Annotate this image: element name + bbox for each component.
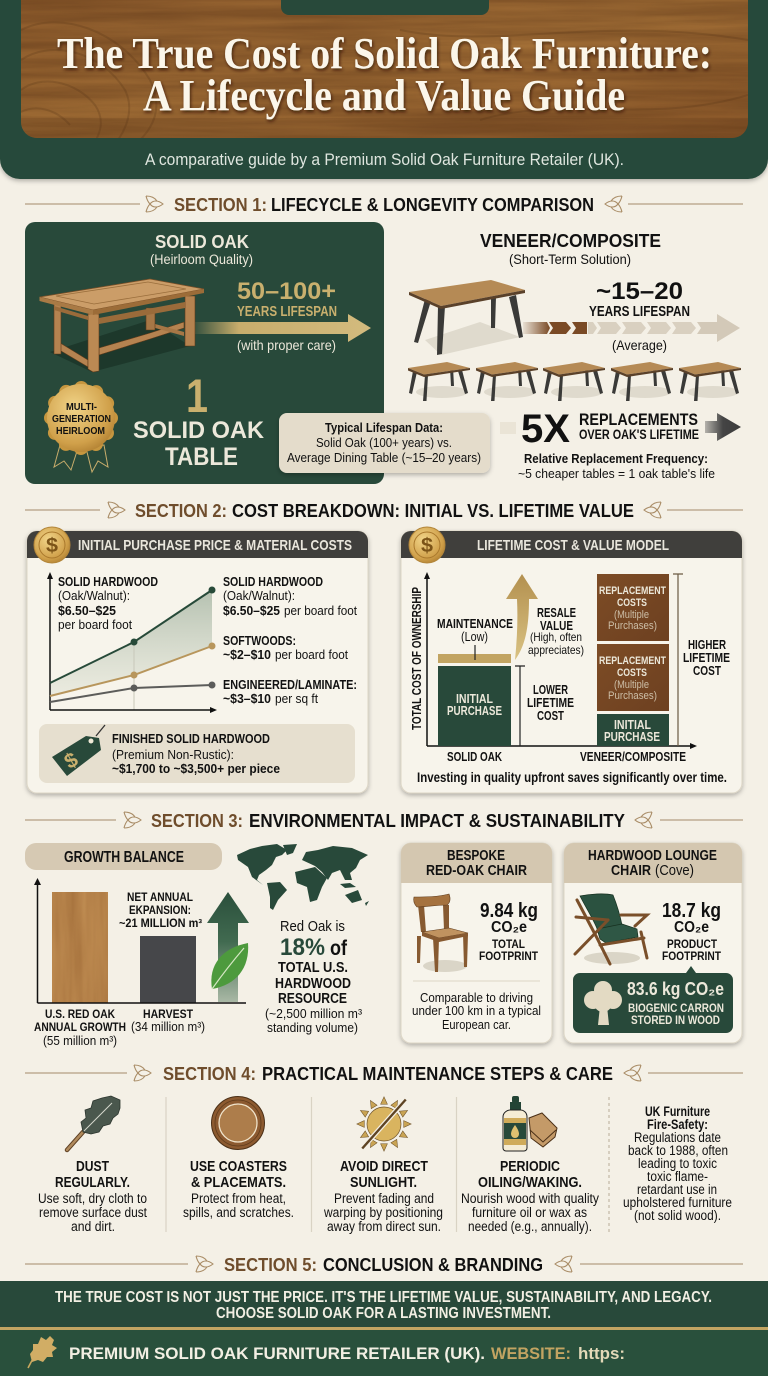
finished hardwood price box: FINISHED SOLID HARDWOOD: [112, 731, 270, 746]
stacked bar chart: LIFETIME: [527, 696, 574, 710]
red oak share stat: of: [330, 937, 348, 960]
UK fire safety note: (not solid wood).: [634, 1208, 721, 1223]
callout: typical lifespan data: Average Dining Table (~15–20 years): [287, 451, 481, 465]
section 5 heading: SECTION 5:: [224, 1254, 317, 1275]
heading pill: [25, 843, 222, 870]
icon: oak leaf: [28, 1336, 57, 1368]
red oak share stat: 18%: [280, 934, 325, 961]
red oak share stat: standing volume): [267, 1020, 358, 1035]
icon: world map: [237, 844, 369, 910]
panel heading: INITIAL PURCHASE PRICE & MATERIAL COSTS: [78, 537, 352, 554]
icon: lounge chair: [575, 894, 647, 964]
bar labels: (55 million m³): [43, 1034, 117, 1048]
icon: crossed-out sun: [357, 1097, 411, 1151]
step: avoid sunlight: SUNLIGHT.: [350, 1174, 417, 1191]
stacked bar chart: COST: [537, 709, 564, 723]
stacked bar chart: (Low): [461, 630, 488, 644]
footprint figures: FOOTPRINT: [479, 949, 539, 963]
chart labels: SOFTWOODS:: [223, 633, 296, 648]
panel: initial purchase price: [27, 527, 368, 793]
footer band: PREMIUM SOLID OAK FURNITURE RETAILER (UK).: [69, 1344, 485, 1363]
step: dust regularly: Use soft, dry cloth to: [38, 1191, 147, 1206]
stacked bar chart: (Multiple: [614, 609, 649, 621]
bar labels: ANNUAL GROWTH: [34, 1020, 126, 1034]
growth balance chart: [25, 843, 249, 1048]
stacked bar chart: RESALE: [537, 606, 576, 620]
step: periodic oiling: OILING/WAKING.: [478, 1174, 582, 1191]
panel: bespoke chair: [401, 843, 552, 1043]
stacked bar chart: LOWER: [533, 683, 568, 697]
net expansion label: NET ANNUAL: [127, 892, 193, 904]
badge: heirloom medal: GENERATION: [52, 413, 111, 425]
biogenic carbon callout: STORED IN WOOD: [631, 1013, 720, 1027]
step: use coasters: [183, 1096, 294, 1220]
solid oak heading: [150, 232, 253, 267]
stacked bar chart: Purchases): [608, 690, 657, 702]
panel: bespoke chair: RED-OAK CHAIR: [426, 863, 527, 879]
footprint figures: CO₂e: [491, 919, 527, 936]
panel heading: LIFETIME COST & VALUE MODEL: [477, 537, 669, 554]
section 2 heading: COST BREAKDOWN: INITIAL VS. LIFETIME VALUE: [232, 500, 634, 521]
replacement multiplier: OVER OAK'S LIFETIME: [579, 427, 699, 442]
comparison note: Comparable to driving: [420, 991, 533, 1005]
stacked bar chart: (Multiple: [614, 679, 649, 691]
section 3 heading: SECTION 3:: [151, 810, 243, 831]
red oak share stat: RESOURCE: [278, 991, 347, 1007]
chart labels: $6.50–$25: [58, 603, 116, 618]
stacked bar chart: COST: [693, 663, 721, 678]
chart labels: $6.50–$25: [223, 603, 280, 618]
UK fire safety note: back to 1988, often: [628, 1143, 728, 1158]
icon: tree: [584, 981, 622, 1025]
oak lifespan value: YEARS LIFESPAN: [237, 304, 337, 320]
stacked bar chart: COSTS: [617, 597, 647, 609]
chart labels: per sq ft: [275, 691, 318, 706]
section 2 heading: [25, 500, 743, 521]
panel: lounge chair: HARDWOOD LOUNGE: [588, 848, 717, 864]
step: use coasters: Protect from heat,: [191, 1191, 286, 1206]
stacked bar chart: (High, often: [530, 630, 582, 644]
red oak share stat: Red Oak is: [280, 918, 345, 935]
panel: bespoke chair: BESPOKE: [447, 848, 505, 864]
veneer lifespan value: YEARS LIFESPAN: [589, 304, 690, 320]
UK fire safety note: upholstered furniture: [623, 1195, 732, 1210]
stacked bar chart: COSTS: [617, 667, 647, 679]
section 2 heading: SECTION 2:: [135, 500, 227, 521]
UK fire safety note: UK Furniture: [645, 1104, 710, 1119]
footprint figures: 18.7 kg: [662, 900, 721, 922]
panel: lifetime cost model: [401, 527, 742, 793]
footer band: [0, 1330, 768, 1376]
step: periodic oiling: Nourish wood with quality: [461, 1191, 599, 1206]
chart labels: SOLID HARDWOOD: [58, 574, 158, 589]
veneer heading: [480, 231, 661, 267]
panel: lounge chair: CHAIR: [611, 863, 651, 879]
replacement frequency note: ~5 cheaper tables = 1 oak table's life: [518, 466, 715, 481]
stacked bar chart: REPLACEMENT: [599, 585, 666, 597]
UK fire safety note: leading to toxic: [638, 1156, 717, 1171]
step: avoid sunlight: [323, 1097, 443, 1234]
icon: coin: [409, 527, 445, 563]
section 1 heading: SECTION 1:: [174, 194, 267, 215]
chart labels: per board foot: [284, 603, 357, 618]
UK fire safety note: Regulations date: [634, 1130, 721, 1145]
step: periodic oiling: furniture oil or wax as: [472, 1205, 587, 1220]
conclusion band: [0, 1281, 768, 1327]
stacked bar chart: VENEER/COMPOSITE: [580, 750, 686, 764]
solid oak heading: SOLID OAK: [155, 232, 249, 252]
comparison note: under 100 km in a typical: [412, 1004, 541, 1018]
veneer lifespan value: ~15–20: [596, 278, 683, 305]
step: dust regularly: [38, 1096, 147, 1234]
replacement multiplier: [500, 407, 699, 451]
step: dust regularly: remove surface dust: [39, 1205, 147, 1220]
icon: coin: $: [46, 535, 58, 557]
chart labels: [58, 574, 357, 706]
stacked bar chart: MAINTENANCE: [437, 617, 513, 631]
replacement frequency note: Relative Replacement Frequency:: [524, 451, 708, 466]
net expansion label: [119, 892, 202, 930]
step: use coasters: USE COASTERS: [190, 1158, 287, 1175]
solid oak heading: (Heirloom Quality): [150, 252, 253, 267]
step: use coasters: & PLACEMATS.: [191, 1174, 286, 1191]
header band: [0, 0, 768, 179]
step: avoid sunlight: AVOID DIRECT: [340, 1158, 428, 1175]
wood title board: [21, 0, 748, 140]
icon: oil bottle and cloth: [503, 1096, 557, 1151]
step: dust regularly: DUST: [76, 1158, 109, 1175]
chart labels: per board foot: [275, 647, 348, 662]
replacement frequency note: [518, 451, 715, 481]
chart labels: per board foot: [58, 617, 132, 632]
chart labels: (Oak/Walnut):: [58, 588, 130, 603]
arrow: veneer lifespan: [523, 314, 740, 342]
icon: oak table: [40, 279, 204, 372]
footer band: WEBSITE:: [491, 1344, 571, 1363]
arrow: replacements: [705, 413, 741, 441]
net expansion label: ~21 MILLION m³: [119, 918, 202, 930]
heading pill: GROWTH BALANCE: [64, 849, 184, 866]
stacked bar chart: PURCHASE: [447, 704, 502, 718]
arrow: oak lifespan: [195, 314, 371, 342]
stacked bar chart: INITIAL: [456, 692, 493, 706]
oak lifespan value: [237, 278, 337, 353]
stacked bar chart: appreciates): [528, 643, 584, 657]
callout: typical lifespan data: [279, 413, 490, 473]
UK fire safety note: Fire-Safety:: [647, 1117, 708, 1132]
oak lifespan value: (with proper care): [237, 337, 336, 353]
bar labels: (34 million m³): [131, 1020, 205, 1034]
section 4 heading: PRACTICAL MAINTENANCE STEPS & CARE: [262, 1063, 613, 1084]
stacked bar chart: REPLACEMENT: [599, 655, 666, 667]
oak lifespan value: 50–100+: [237, 278, 336, 305]
UK fire safety note: toxic flame-: [647, 1169, 708, 1184]
icon: feather duster: [67, 1096, 120, 1150]
step: avoid sunlight: warping by positioning: [323, 1205, 443, 1220]
veneer lifespan value: [589, 278, 690, 353]
badge: heirloom medal: [47, 384, 115, 472]
chart labels: (Oak/Walnut):: [223, 588, 295, 603]
icon: veneer table: [409, 280, 525, 355]
icon: coin: [34, 527, 70, 563]
finished hardwood price box: (Premium Non-Rustic):: [112, 747, 234, 762]
icon: coaster: [212, 1096, 264, 1150]
oak table count: TABLE: [165, 443, 238, 471]
icon: price tag: [52, 725, 105, 776]
chart labels: ~$3–$10: [223, 691, 271, 706]
net expansion label: EKPANSION:: [129, 905, 191, 917]
section 1 heading: [25, 194, 743, 215]
top tab: [281, 0, 489, 15]
oak table count: [133, 369, 265, 471]
veneer heading: (Short-Term Solution): [509, 252, 631, 267]
badge: heirloom medal: HEIRLOOM: [56, 425, 105, 437]
UK fire safety note: [623, 1104, 732, 1223]
footprint figures: CO₂e: [674, 919, 709, 936]
chart labels: ENGINEERED/LAMINATE:: [223, 677, 357, 692]
step: periodic oiling: [461, 1096, 599, 1234]
title: A Lifecycle and Value Guide: [143, 71, 625, 120]
panel: solid oak: [25, 222, 384, 484]
UK fire safety note: retardant use in: [637, 1182, 717, 1197]
oak table count: 1: [186, 369, 208, 422]
step: dust regularly: and dirt.: [71, 1219, 115, 1234]
title: [57, 29, 712, 120]
section 3 heading: ENVIRONMENTAL IMPACT & SUSTAINABILITY: [249, 810, 626, 831]
footprint figures: PRODUCT: [667, 937, 718, 951]
callout: typical lifespan data: Solid Oak (100+ years) vs.: [316, 436, 452, 450]
stacked bar chart: Purchases): [608, 620, 657, 632]
footprint figures: [662, 900, 722, 963]
replacement multiplier: REPLACEMENTS: [579, 411, 698, 429]
badge: heirloom medal: MULTI-: [66, 401, 97, 413]
oak table count: SOLID OAK: [133, 417, 265, 444]
footprint figures: [479, 900, 539, 963]
axis title: TOTAL COST OF OWNERSHIP: [409, 587, 424, 730]
footprint figures: FOOTPRINT: [662, 949, 722, 963]
stacked bar chart: LIFETIME: [683, 650, 730, 665]
footprint figures: 9.84 kg: [480, 900, 538, 922]
arrow: net growth with leaf: [207, 892, 249, 1002]
section 3 heading: [25, 810, 743, 831]
biogenic carbon callout: 83.6 kg CO₂e: [627, 979, 724, 999]
conclusion band: CHOOSE SOLID OAK FOR A LASTING INVESTMENT.: [216, 1305, 551, 1322]
step: use coasters: spills, and scratches.: [183, 1205, 294, 1220]
callout: typical lifespan data: Typical Lifespan Data:: [325, 421, 443, 435]
footprint figures: TOTAL: [492, 937, 525, 951]
stacked bar chart: INITIAL: [614, 718, 651, 732]
section 5 heading: [25, 1254, 743, 1275]
panel: lounge chair: (Cove): [655, 863, 694, 879]
panel: lounge chair: [564, 843, 742, 1043]
bar labels: [34, 1007, 205, 1048]
icon: dining chair: [414, 894, 468, 972]
section 1 heading: LIFECYCLE & LONGEVITY COMPARISON: [271, 194, 594, 215]
step: periodic oiling: PERIODIC: [500, 1158, 560, 1175]
step: dust regularly: REGULARLY.: [55, 1174, 130, 1191]
red oak share stat: [265, 918, 363, 1035]
icons: five replacement tables: [408, 362, 741, 401]
stacked bar chart: VALUE: [540, 619, 573, 633]
step: avoid sunlight: Prevent fading and: [334, 1191, 434, 1206]
comparison note: [412, 991, 541, 1032]
section 5 heading: CONCLUSION & BRANDING: [323, 1254, 543, 1275]
comparison note: European car.: [442, 1018, 511, 1032]
section 4 heading: [25, 1063, 743, 1084]
red oak share stat: TOTAL U.S.: [278, 960, 348, 976]
stacked bar chart: PURCHASE: [604, 730, 660, 744]
footer band: https:: [578, 1344, 625, 1363]
bars and axes: [34, 878, 246, 1003]
title: The True Cost of Solid Oak Furniture:: [57, 29, 712, 78]
veneer lifespan value: (Average): [612, 337, 667, 353]
veneer heading: VENEER/COMPOSITE: [480, 231, 661, 251]
icon: price tag: $: [60, 748, 82, 774]
subtitle: A comparative guide by a Premium Solid Oak Furniture Retailer (UK).: [145, 150, 624, 169]
stacked bar chart: SOLID OAK: [447, 750, 502, 764]
arrow: resale value: [506, 574, 538, 660]
red oak share stat: (~2,500 million m³: [265, 1006, 363, 1021]
bar labels: HARVEST: [143, 1007, 194, 1021]
section 4 heading: SECTION 4:: [163, 1063, 256, 1084]
icon: coin: $: [421, 535, 433, 557]
biogenic carbon callout: BIOGENIC CARRON: [628, 1001, 724, 1015]
replacement multiplier: 5X: [521, 407, 570, 451]
red oak share stat: HARDWOOD: [275, 976, 351, 992]
step: avoid sunlight: away from direct sun.: [327, 1219, 441, 1234]
stacked bar chart: HIGHER: [688, 637, 726, 652]
stacked bar chart: [409, 572, 730, 764]
bar labels: U.S. RED OAK: [45, 1007, 115, 1021]
finished hardwood price box: [39, 724, 355, 783]
line chart: [47, 572, 217, 713]
step: periodic oiling: needed (e.g., annually).: [468, 1219, 592, 1234]
chart labels: SOLID HARDWOOD: [223, 574, 323, 589]
finished hardwood price box: ~$1,700 to ~$3,500+ per piece: [112, 761, 280, 776]
chart labels: ~$2–$10: [223, 647, 271, 662]
biogenic carbon callout: [573, 966, 733, 1033]
